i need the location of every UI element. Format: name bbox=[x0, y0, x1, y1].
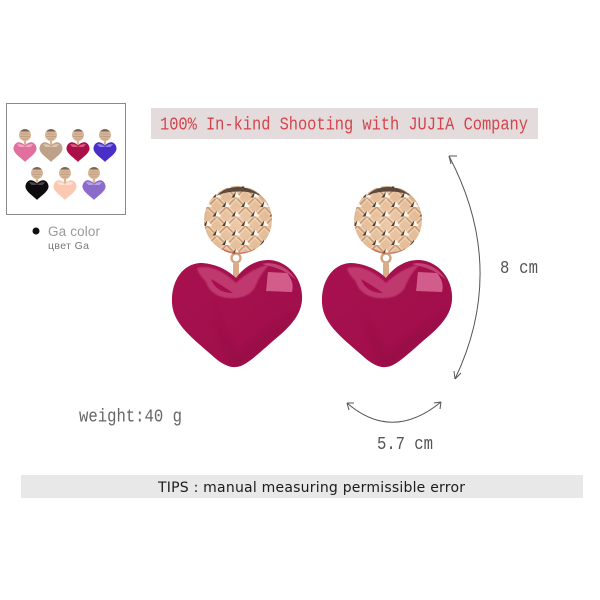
swatch: pink earring bbox=[13, 129, 37, 162]
swatch: black earring bbox=[25, 167, 49, 200]
swatch: blue-violet earring bbox=[93, 129, 117, 162]
left earring bbox=[172, 186, 302, 367]
swatch: peach earring bbox=[53, 167, 77, 200]
right earring bbox=[322, 186, 452, 367]
arrow: width dimension bbox=[347, 402, 441, 422]
weight label: weight:40 g bbox=[79, 407, 182, 428]
width label: 5.7 cm bbox=[377, 435, 433, 456]
tips bar bbox=[21, 475, 583, 498]
colour legend label: Ga color bbox=[48, 224, 100, 239]
swatch: beige earring bbox=[39, 129, 63, 162]
title banner bbox=[151, 108, 538, 139]
arrow: height dimension bbox=[449, 156, 480, 379]
tips bar: TIPS : manual measuring permissible error bbox=[157, 480, 465, 496]
height label: 8 cm bbox=[500, 259, 538, 280]
colour legend label russian: цвет Ga bbox=[48, 240, 89, 252]
colour swatch panel bbox=[6, 104, 126, 214]
title banner: 100% In-kind Shooting with JUJIA Company bbox=[160, 115, 528, 136]
swatch: lavender earring bbox=[82, 167, 106, 200]
swatch: crimson earring bbox=[66, 129, 90, 162]
colour legend dot bbox=[32, 228, 40, 234]
